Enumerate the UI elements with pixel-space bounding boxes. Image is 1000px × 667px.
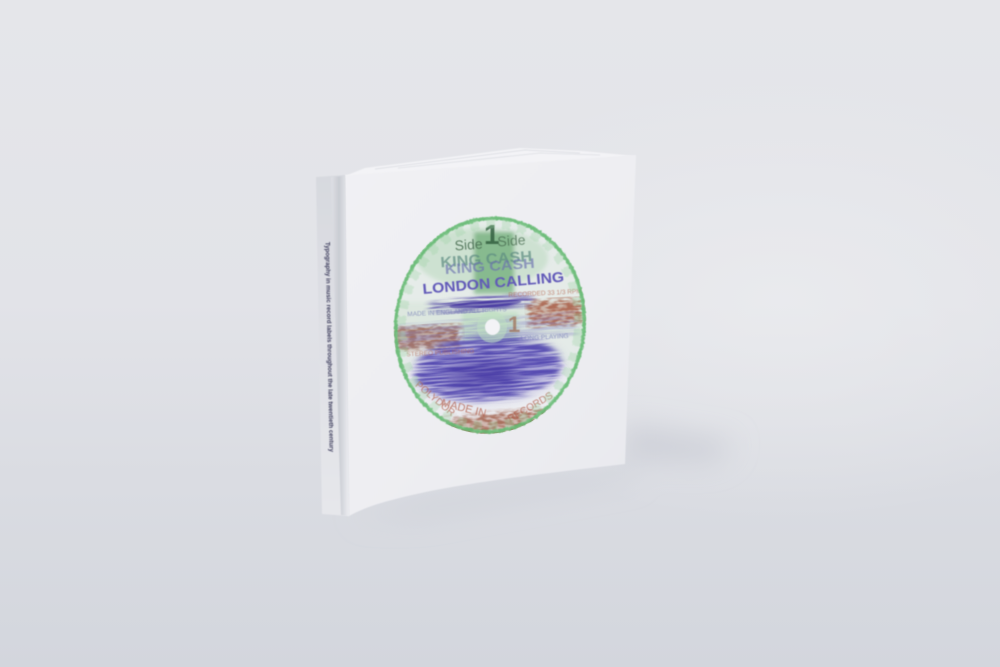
lower red rim text: POLYDOR xyxy=(413,380,457,419)
small label rows: MADE IN ENGLAND ALL RIGHTS xyxy=(407,306,508,318)
green rim texture xyxy=(388,212,592,438)
record label artwork xyxy=(393,215,587,435)
side markers xyxy=(455,224,526,251)
background glow xyxy=(400,80,1000,520)
book xyxy=(316,148,636,516)
lower red rim text: RECORDS xyxy=(506,390,555,425)
side markers: Side xyxy=(497,232,526,249)
green upper area xyxy=(395,228,585,342)
spine xyxy=(316,175,349,516)
lower red rim text: MADE IN xyxy=(440,397,487,420)
side number: 1 xyxy=(508,312,520,337)
cast shadow xyxy=(350,425,735,516)
side markers: 1 xyxy=(484,219,500,250)
small label rows: LONG PLAYING xyxy=(521,333,569,342)
page block xyxy=(345,148,636,178)
artist text: KING CASH xyxy=(440,248,533,271)
main heading: LONDON CALLING xyxy=(422,270,565,298)
side markers: Side xyxy=(454,236,483,253)
book photograph scene xyxy=(0,148,1000,667)
spindle hole xyxy=(485,319,500,335)
red bands xyxy=(394,297,590,441)
pale green disc wash xyxy=(380,204,600,446)
lower red rim text xyxy=(415,380,553,422)
small label rows: STEREO PUBLISHING xyxy=(406,348,474,358)
front cover xyxy=(345,155,636,516)
artist text: KING CASH xyxy=(444,255,535,277)
green outer rim xyxy=(382,206,598,444)
spine hinge xyxy=(331,176,349,516)
small label rows xyxy=(406,288,582,358)
purple blobs xyxy=(395,289,582,407)
white lower wash xyxy=(437,364,567,418)
small label rows: RECORDED 33 1/3 RPM xyxy=(508,288,582,299)
ghost label texts xyxy=(406,219,582,425)
centre hub xyxy=(477,311,507,343)
spine title: Typography in music record labels throughout the late twentieth century xyxy=(324,242,335,452)
